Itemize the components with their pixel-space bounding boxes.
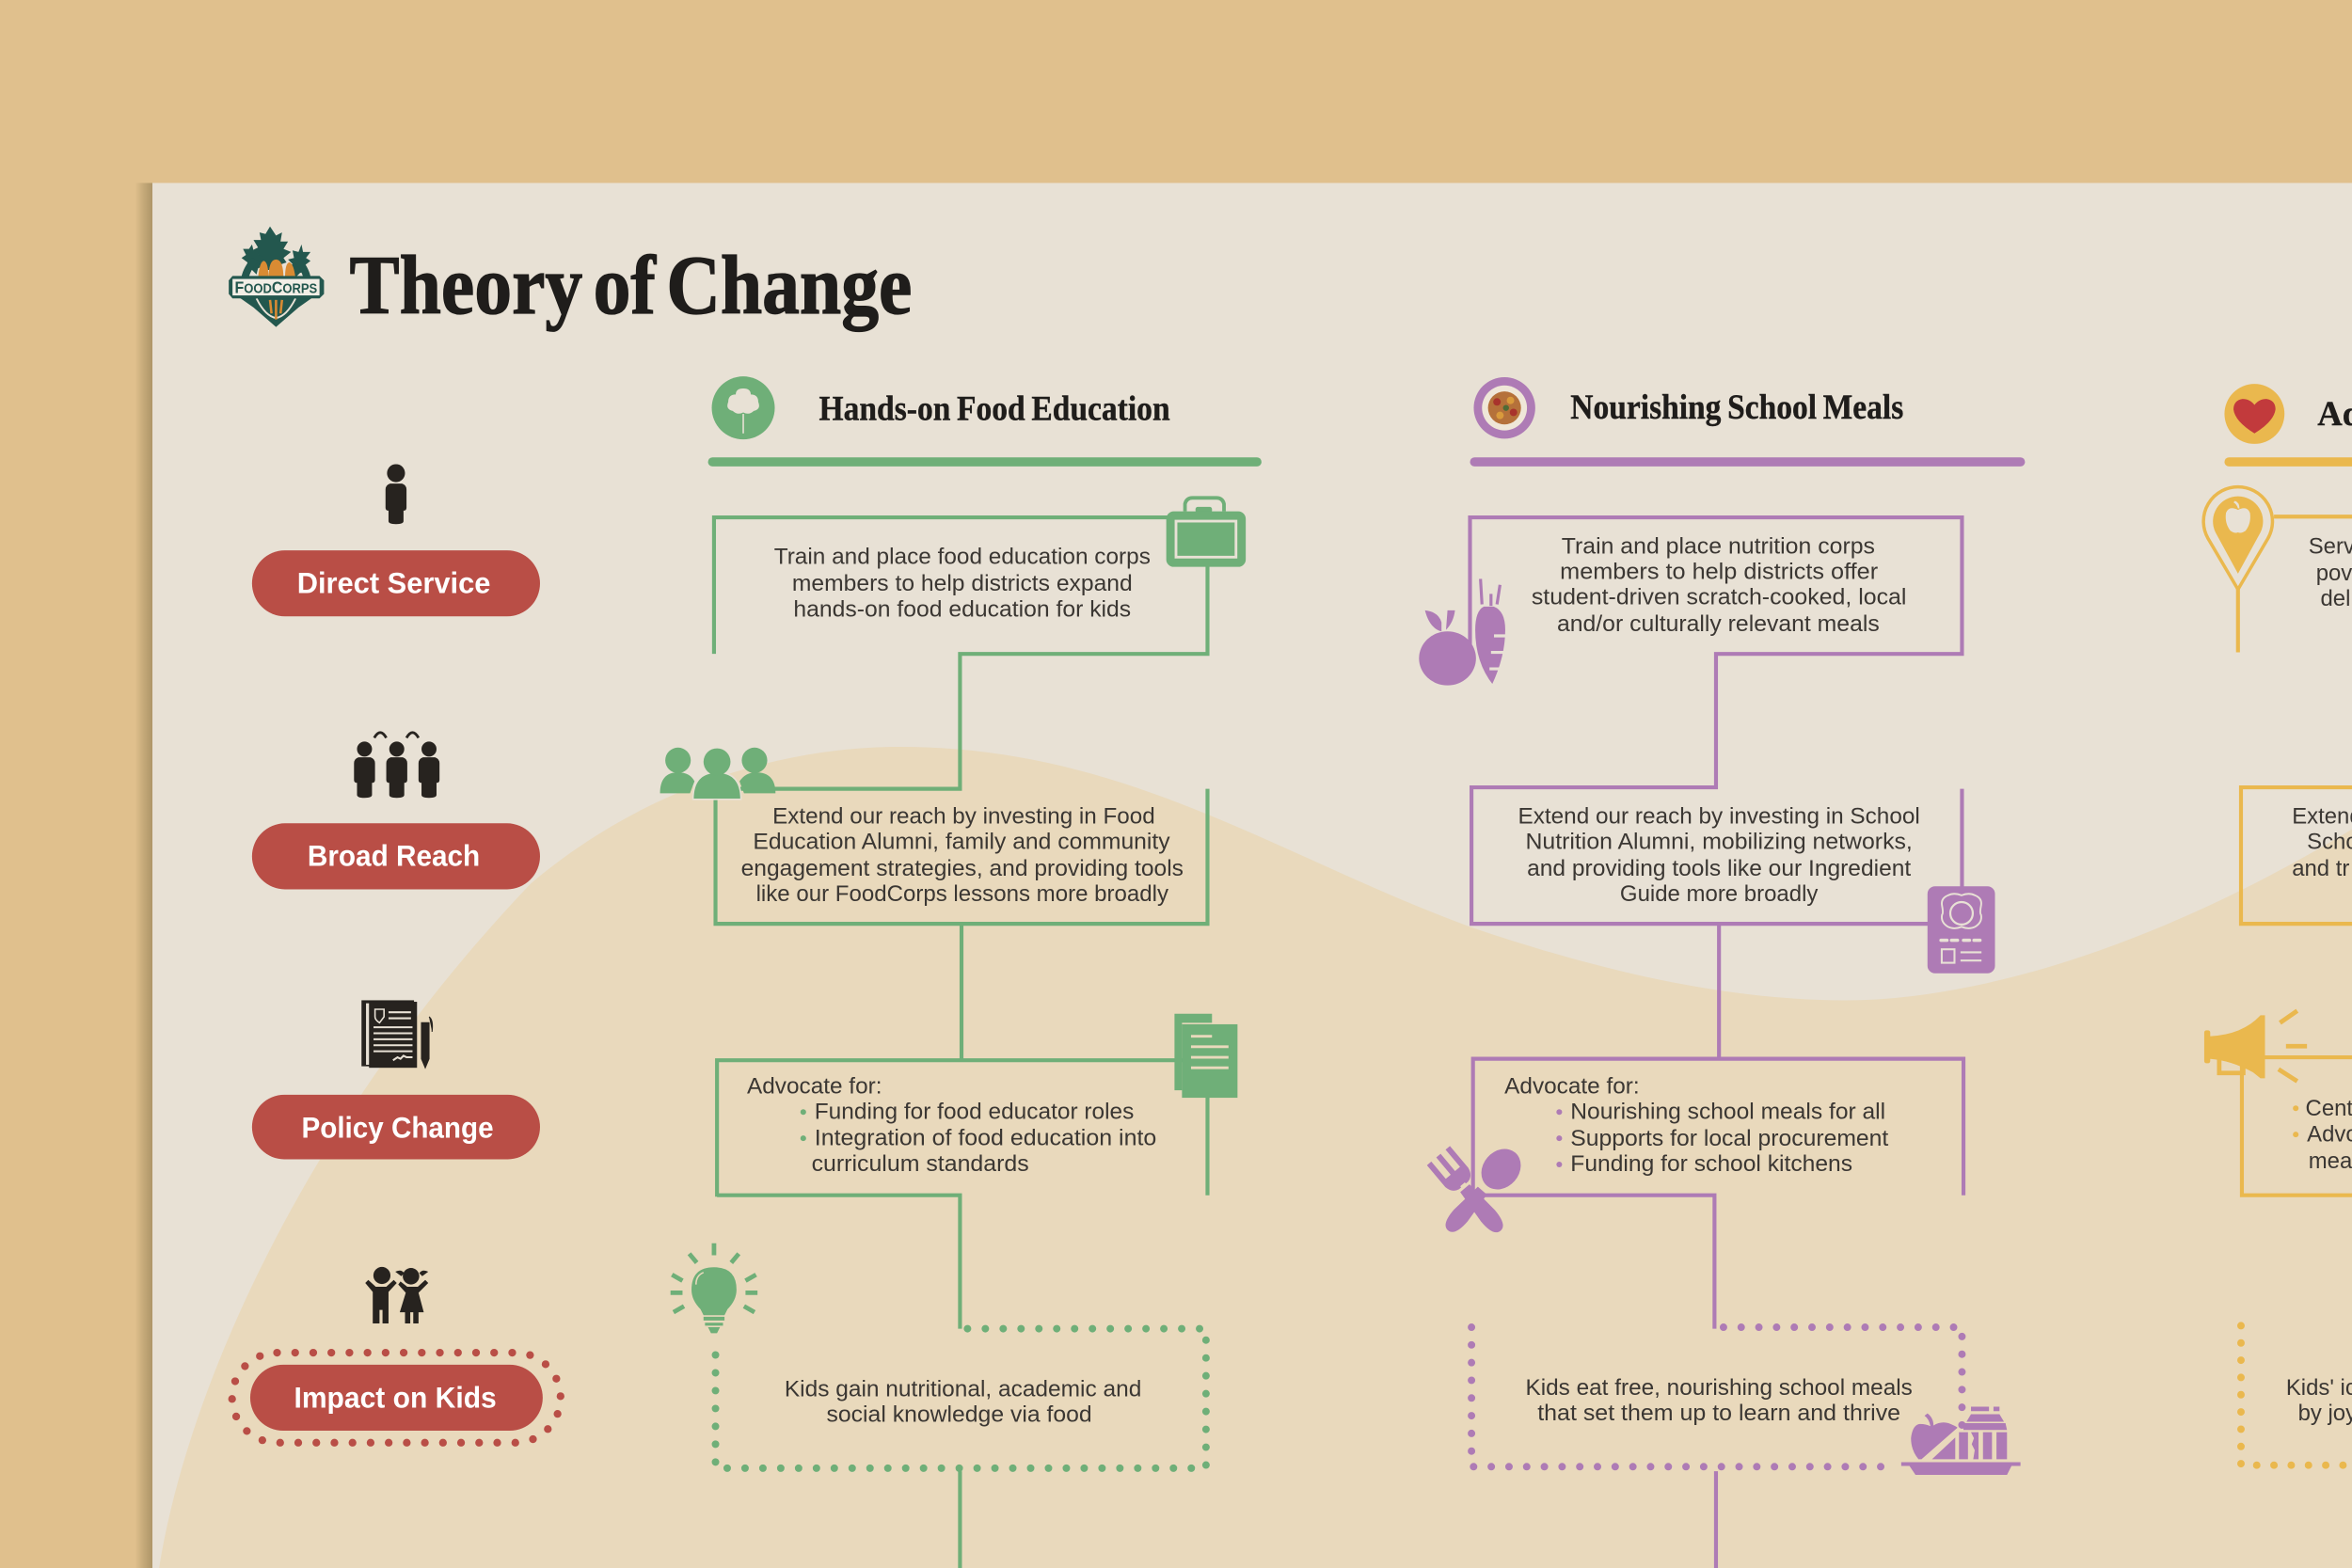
icon: light bulb xyxy=(671,1243,757,1333)
text: direct service: members to help districts expand xyxy=(792,571,1133,596)
icon: documents xyxy=(1174,1014,1237,1098)
column: third column, clipped at the right edge xyxy=(2203,384,2352,1465)
text: direct service: Train and place food education corps xyxy=(774,544,1151,569)
icon: signed document and pen xyxy=(361,1000,433,1068)
text: broad reach: Education Alumni, family and community xyxy=(753,829,1170,854)
text: direct service (clipped) xyxy=(2309,533,2352,611)
pill text: Policy Change xyxy=(301,1111,494,1144)
logo: FoodCorps: FOODCORPS xyxy=(235,278,317,297)
heading rule xyxy=(2224,457,2352,467)
dotted impact box xyxy=(716,1329,1206,1468)
heading rule xyxy=(708,457,1262,467)
icon: single person xyxy=(386,464,406,524)
text: policy change: Funding for school kitchens xyxy=(1570,1151,1852,1177)
flow connector lines xyxy=(714,517,1207,1568)
text: policy change: Nourishing school meals for all xyxy=(1570,1099,1885,1124)
row label: Impact on Kids xyxy=(232,1267,561,1443)
text: direct service xyxy=(1532,533,1906,637)
text: policy change (clipped) xyxy=(2293,1096,2352,1174)
pill text: Direct Service xyxy=(297,567,490,600)
icon: fork and spoon xyxy=(1427,1141,1529,1237)
column heading: Nourishing School Meals xyxy=(1570,388,1903,426)
text: broad reach: Nutrition Alumni, mobilizing networks, xyxy=(1525,829,1913,854)
text: policy change: Integration of food education into xyxy=(815,1125,1156,1150)
pill xyxy=(252,550,540,616)
column icon: plate of food xyxy=(1473,377,1535,438)
column: Nourishing School Meals xyxy=(1419,377,2025,1568)
text: policy change xyxy=(747,1073,1156,1177)
pill xyxy=(250,1365,543,1431)
text: impact on kids xyxy=(785,1376,1141,1427)
text: impact on kids: social knowledge via food xyxy=(827,1402,1092,1427)
text: impact on kids: that set them up to learn and thrive xyxy=(1537,1401,1900,1426)
text: direct service (clipped): del xyxy=(2320,586,2350,611)
text: direct service: and/or culturally relevant meals xyxy=(1557,611,1880,637)
text: policy change: Funding for food educator roles xyxy=(815,1099,1134,1124)
column: Hands-on Food Education xyxy=(660,376,1262,1568)
text: policy change: curriculum standards xyxy=(812,1151,1029,1177)
flow connector lines xyxy=(1470,517,1963,1568)
dotted impact box xyxy=(2241,1325,2352,1465)
wave background shape xyxy=(159,747,2352,1568)
row label: Broad Reach xyxy=(252,733,540,889)
text: broad reach: Extend our reach by investing in School xyxy=(1518,803,1920,829)
heading rule xyxy=(1470,457,2025,467)
text: broad reach (clipped): and tr xyxy=(2292,856,2349,881)
text: broad reach (clipped) xyxy=(2292,803,2352,881)
icon: briefcase xyxy=(1167,498,1246,567)
column heading: Hands-on Food Education xyxy=(819,388,1170,427)
text: direct service: Train and place nutrition corps xyxy=(1562,533,1875,559)
text: impact on kids xyxy=(1525,1375,1913,1426)
pill xyxy=(252,1095,540,1159)
text: policy change: Supports for local procurement xyxy=(1570,1126,1889,1151)
logo: FoodCorps xyxy=(229,227,324,327)
column icon: tree xyxy=(712,376,775,439)
text: direct service (clipped): pov xyxy=(2316,561,2352,586)
text: policy change: Advocate for: xyxy=(1504,1073,1640,1099)
icon: apple and carrot xyxy=(1419,578,1507,686)
icon: group of people xyxy=(660,748,775,800)
pill text: Broad Reach xyxy=(308,840,480,873)
text: broad reach xyxy=(1518,803,1920,907)
icon: ingredient guide card xyxy=(1928,886,1995,974)
text: policy change (clipped): Cent xyxy=(2306,1096,2352,1121)
panel shadow xyxy=(135,183,153,1568)
icon: megaphone xyxy=(2204,1011,2307,1082)
dotted impact box xyxy=(1471,1327,1962,1466)
text: direct service: student-driven scratch-cooked, local xyxy=(1532,585,1906,610)
dotted highlight ring xyxy=(232,1353,561,1443)
column icon: heart xyxy=(2224,384,2284,444)
row label: Direct Service xyxy=(252,464,540,616)
text: broad reach: engagement strategies, and providing tools xyxy=(741,856,1184,881)
icon: location pin with apple xyxy=(2203,487,2272,590)
text: direct service: hands-on food education for kids xyxy=(793,596,1131,622)
text: impact on kids: Kids eat free, nourishing school meals xyxy=(1525,1375,1913,1401)
title: Theory of Change xyxy=(350,239,912,332)
text: broad reach: Guide more broadly xyxy=(1620,881,1818,907)
icon: two children xyxy=(365,1267,428,1323)
text: impact on kids (clipped) xyxy=(2286,1375,2352,1426)
flow connector lines xyxy=(2238,516,2352,1196)
text: broad reach: Extend our reach by investing in Food xyxy=(772,803,1155,829)
icon: three people xyxy=(354,733,439,798)
text: policy change (clipped): mea xyxy=(2309,1148,2352,1174)
pill text: Impact on Kids xyxy=(294,1381,497,1414)
row label: Policy Change xyxy=(252,1000,540,1159)
text: direct service xyxy=(774,544,1151,622)
text: policy change: Advocate for: xyxy=(747,1073,882,1099)
text: policy change xyxy=(1504,1073,1889,1177)
text: broad reach: and providing tools like our Ingredient xyxy=(1527,856,1912,881)
pill xyxy=(252,823,540,889)
text: direct service: members to help districts offer xyxy=(1560,559,1878,584)
text: broad reach: like our FoodCorps lessons more broadly xyxy=(756,881,1168,907)
text: broad reach xyxy=(741,803,1184,907)
text: impact on kids: Kids gain nutritional, academic and xyxy=(785,1376,1141,1402)
icon: lunch tray xyxy=(1901,1407,2021,1475)
